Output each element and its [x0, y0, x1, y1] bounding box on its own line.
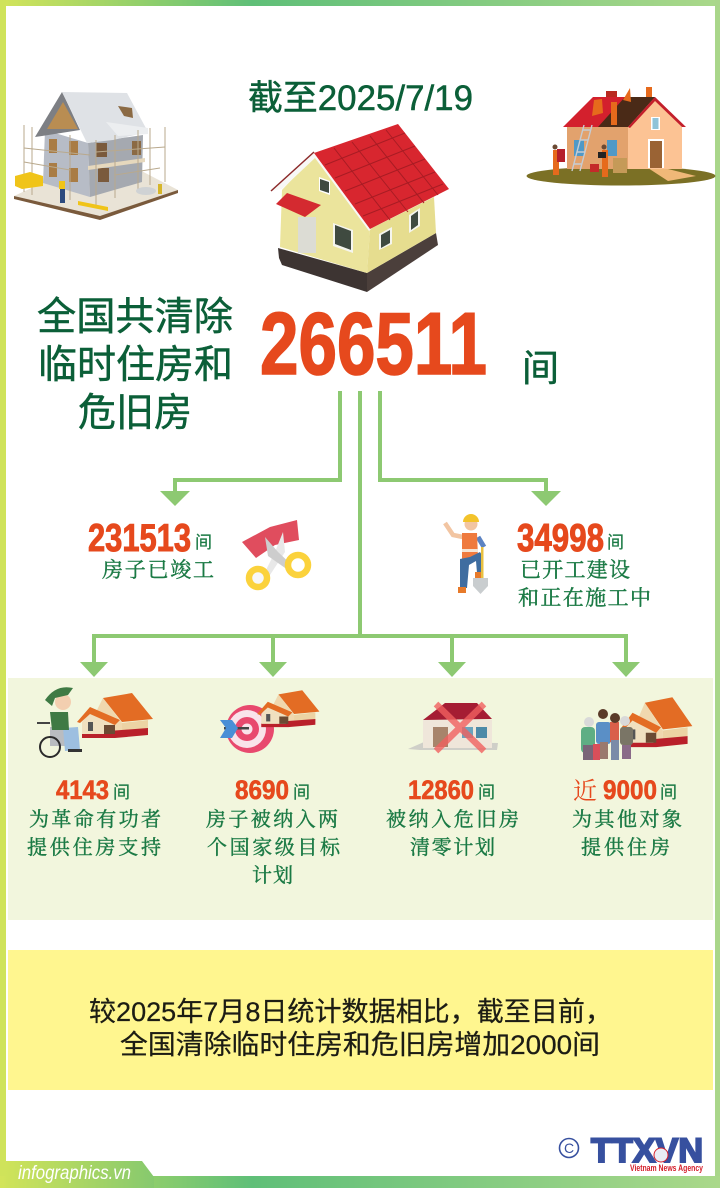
stat: other beneficiaries	[572, 771, 682, 860]
stat: other beneficiaries: 提供住房	[581, 831, 670, 860]
big number: total: 266511	[260, 294, 487, 393]
icon: construction worker	[445, 514, 488, 594]
icon: family with house	[581, 697, 692, 760]
stat: national target programmes: 8690	[235, 775, 289, 805]
stat: under construction: 已开工建设	[520, 554, 630, 584]
title: date: 截至2025/7/19	[248, 79, 473, 118]
logo: TTXVN: TTXVN	[591, 1132, 703, 1170]
panel: yellow summary: 全国清除临时住房和危旧房增加2000间	[120, 1030, 600, 1060]
icon: ribbon and scissors	[242, 520, 308, 587]
icon: main red-roof house	[271, 124, 449, 292]
stat: other beneficiaries: 近	[573, 771, 597, 806]
panel: yellow summary	[8, 950, 713, 1090]
stat: completed: 间	[195, 528, 212, 553]
heading: left label	[37, 296, 233, 435]
footer: site name: infographics.vn	[18, 1163, 131, 1184]
copyright symbol	[560, 1138, 578, 1158]
stat: under construction: 和正在施工中	[518, 582, 651, 612]
stat: completed: 房子已竣工	[102, 554, 214, 584]
icon: crossed-out dilapidated house	[408, 703, 498, 751]
stat: revolutionary contributors: 间	[113, 778, 130, 803]
panel: yellow summary: 较2025年7月8日统计数据相比，截至目前，	[89, 997, 612, 1027]
stat: revolutionary contributors: 为革命有功者	[29, 803, 161, 832]
stat: under construction	[517, 517, 651, 612]
stat: national target programmes: 个国家级目标	[207, 831, 341, 860]
heading: left label: 危旧房	[78, 392, 192, 435]
stat: revolutionary contributors	[27, 775, 161, 860]
stat: other beneficiaries: 间	[660, 778, 677, 803]
stat: revolutionary contributors: 4143	[56, 775, 109, 805]
stat: national target programmes	[206, 775, 341, 888]
stat: other beneficiaries: 9000	[603, 775, 657, 805]
stat: national target programmes: 房子被纳入两	[206, 803, 338, 832]
stat: dilapidated housing elimination: 被纳入危旧房	[386, 803, 519, 832]
footer bar	[0, 1161, 720, 1188]
stat: dilapidated housing elimination: 清零计划	[410, 831, 495, 860]
stat: dilapidated housing elimination: 间	[478, 778, 495, 803]
stat: national target programmes: 计划	[252, 859, 293, 888]
heading: left label: 临时住房和	[38, 344, 233, 387]
stat: revolutionary contributors: 提供住房支持	[27, 831, 161, 860]
stat: under construction: 34998	[517, 517, 604, 560]
stat: other beneficiaries: 为其他对象	[572, 803, 682, 832]
icon: target with house	[220, 690, 319, 753]
stat: dilapidated housing elimination	[386, 775, 519, 860]
copyright symbol: C	[564, 1140, 574, 1156]
heading: left label: 全国共清除	[37, 296, 233, 339]
arrows: main branches	[80, 391, 640, 677]
stat: completed	[88, 517, 214, 584]
stat: completed: 231513	[88, 517, 191, 560]
stat: national target programmes: 间	[293, 778, 310, 803]
stat: under construction: 间	[607, 528, 624, 553]
icon: veteran in wheelchair with house	[37, 687, 153, 757]
unit: 间	[522, 348, 559, 389]
icon: house under construction	[14, 92, 178, 220]
panel: four categories	[8, 678, 713, 920]
stat: dilapidated housing elimination: 12860	[408, 775, 474, 805]
icon: workers on roof house	[526, 87, 716, 186]
